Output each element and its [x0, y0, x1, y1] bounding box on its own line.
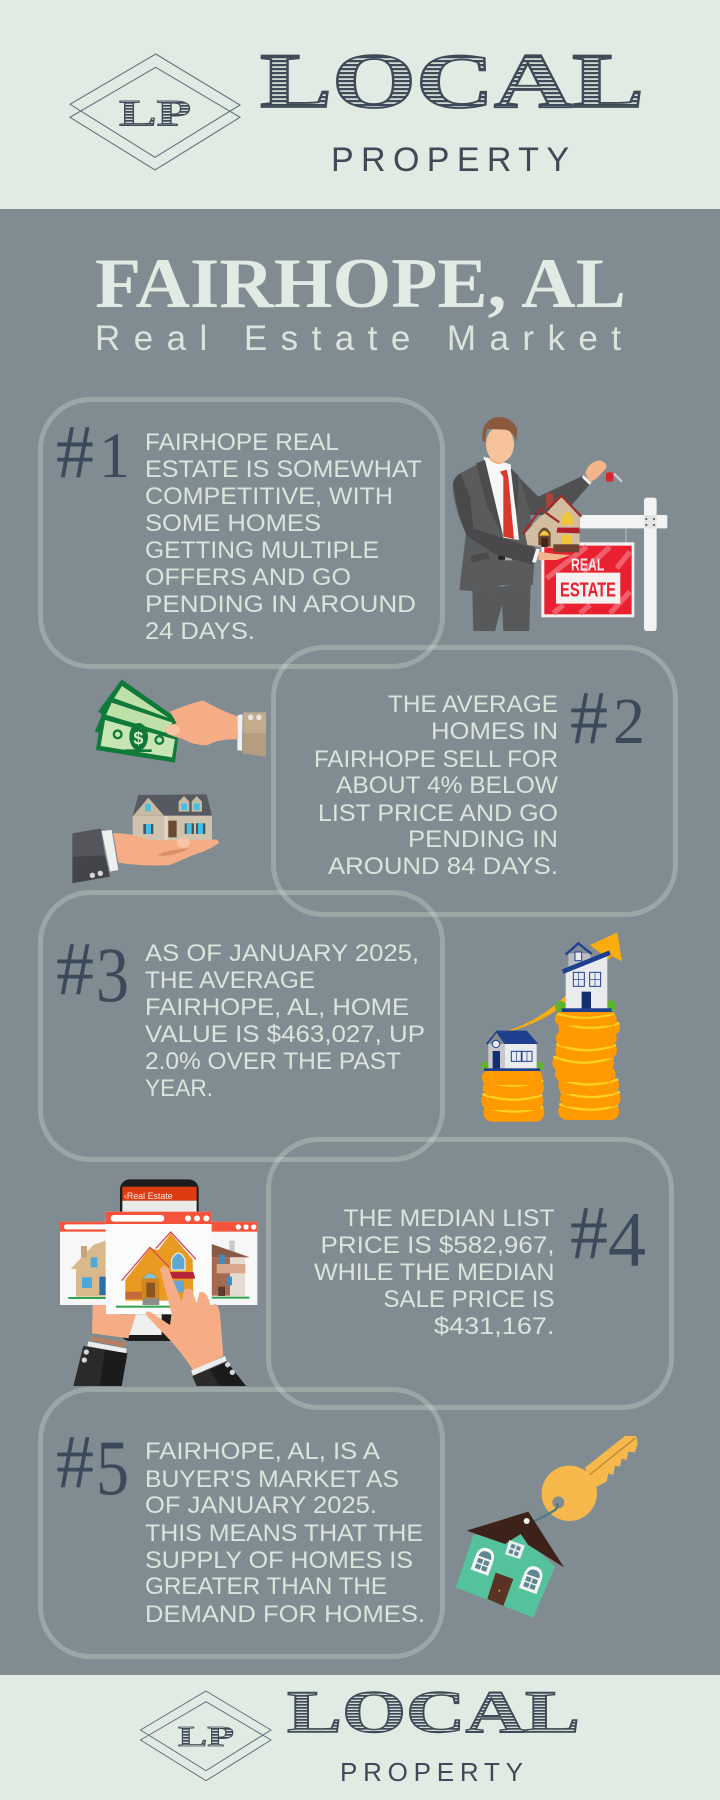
header band	[0, 0, 720, 209]
number 3: 3	[96, 931, 129, 1018]
text block 2: PENDING IN	[408, 826, 558, 853]
icon: money and house exchanged between hands	[72, 679, 266, 883]
text block 3: 2.0% OVER THE PAST	[145, 1048, 401, 1075]
logo word LOCAL: LOCAL	[260, 37, 644, 124]
left listing card	[60, 1222, 117, 1305]
number 1: 1	[99, 420, 130, 492]
text block 5: FAIRHOPE, AL, IS A	[145, 1438, 381, 1465]
icon: houses on growing coin stacks	[477, 932, 622, 1122]
text block 2: LIST PRICE AND GO	[318, 800, 558, 827]
text block 4: THE MEDIAN LIST	[344, 1205, 555, 1232]
text block 4: PRICE IS $582,967,	[320, 1232, 554, 1259]
text block 5	[145, 1438, 425, 1628]
number 5	[56, 1420, 129, 1511]
text block 4: $431,167.	[434, 1313, 554, 1340]
text block 3: THE AVERAGE	[145, 967, 315, 994]
text block 2: ABOUT 4% BELOW	[336, 772, 559, 799]
number 1: #	[56, 410, 94, 494]
footer logo word PROPERTY: PROPERTY	[340, 1757, 523, 1787]
text block 1: FAIRHOPE REAL	[145, 429, 339, 456]
number 5: 5	[96, 1424, 129, 1511]
tall coin stack	[552, 1012, 621, 1120]
icon: agent with real estate sign	[453, 417, 667, 631]
panel: point 1	[40, 400, 442, 666]
left hand and sleeve	[73, 1305, 136, 1386]
logo diamond mark	[70, 54, 240, 170]
number 3: #	[56, 927, 94, 1011]
subtitle: Real Estate Market	[95, 319, 621, 358]
icon: agent with real estate sign: ESTATE	[560, 578, 616, 601]
footer logo diamond mark: LP	[178, 1721, 234, 1753]
number 4	[570, 1191, 646, 1283]
right listing card	[207, 1222, 257, 1305]
text block 3	[145, 940, 425, 1102]
text block 5: BUYER'S MARKET AS	[145, 1466, 399, 1493]
text block 5: SUPPLY OF HOMES IS	[145, 1547, 413, 1574]
text block 4	[314, 1205, 555, 1340]
icon: money and house exchanged between hands: $	[133, 728, 143, 748]
number 1	[56, 410, 130, 494]
panel: point 2	[274, 648, 676, 914]
number 5: #	[56, 1420, 94, 1504]
text block 1: PENDING IN AROUND	[145, 591, 416, 618]
text block 5: THIS MEANS THAT THE	[145, 1520, 423, 1547]
panel: point 4	[268, 1140, 672, 1408]
text block 1: ESTATE IS SOMEWHAT	[145, 456, 422, 483]
text block 1: 24 DAYS.	[145, 618, 255, 645]
text block 2	[314, 691, 559, 880]
text block 3: YEAR.	[145, 1075, 213, 1102]
text block 2: FAIRHOPE SELL FOR	[314, 746, 558, 773]
text block 4: WHILE THE MEDIAN	[314, 1259, 554, 1286]
text block 1: SOME HOMES	[145, 510, 321, 537]
footer logo word LOCAL: LOCAL	[287, 1679, 580, 1745]
title: FAIRHOPE, AL	[95, 245, 626, 323]
text block 1: OFFERS AND GO	[145, 564, 351, 591]
text block 3: AS OF JANUARY 2025,	[145, 940, 419, 967]
pointing right hand and sleeve	[146, 1266, 246, 1386]
text block 3: VALUE IS $463,027, UP	[145, 1021, 425, 1048]
number 4: #	[570, 1191, 608, 1275]
icon: hands browsing house listings on phone	[60, 1179, 257, 1386]
panel: point 5	[40, 1390, 442, 1656]
footer logo diamond mark	[140, 1691, 271, 1781]
icon: hands browsing house listings on phone: ‹Real Estate	[124, 1191, 173, 1201]
footer band	[0, 1675, 720, 1800]
main listing card	[106, 1212, 212, 1314]
logo diamond mark: LP	[119, 94, 191, 134]
text block 5: OF JANUARY 2025.	[145, 1492, 377, 1519]
text block 2: HOMES IN	[431, 718, 558, 745]
logo word PROPERTY: PROPERTY	[331, 141, 569, 179]
panel: point 3	[40, 892, 442, 1160]
text block 5: GREATER THAN THE	[145, 1573, 387, 1600]
number 2: 2	[613, 685, 645, 758]
text block 3: FAIRHOPE, AL, HOME	[145, 994, 409, 1021]
text block 2: THE AVERAGE	[388, 691, 558, 718]
text block 5: DEMAND FOR HOMES.	[145, 1601, 425, 1628]
icon: house keychain with gold key	[456, 1436, 638, 1618]
number 2	[570, 676, 645, 760]
text block 4: SALE PRICE IS	[384, 1286, 554, 1313]
number 4: 4	[608, 1196, 646, 1283]
text block 1	[145, 429, 422, 645]
text block 1: COMPETITIVE, WITH	[145, 483, 393, 510]
number 2: #	[570, 676, 608, 760]
text block 1: GETTING MULTIPLE	[145, 537, 379, 564]
text block 2: AROUND 84 DAYS.	[328, 853, 558, 880]
small coin stack	[481, 1070, 544, 1122]
number 3	[56, 927, 129, 1018]
icon: agent with real estate sign: REAL	[571, 555, 605, 575]
